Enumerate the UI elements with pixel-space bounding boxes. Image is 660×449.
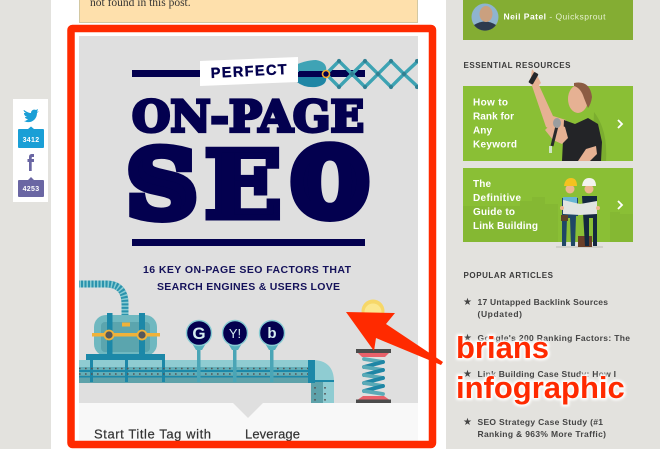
title: seo: O xyxy=(294,131,366,235)
icon: yahoo gauge xyxy=(222,320,248,382)
red frame xyxy=(71,28,432,444)
icon: presenter xyxy=(528,69,606,161)
avatar xyxy=(472,4,498,31)
arrow xyxy=(346,312,443,365)
spring xyxy=(356,349,391,404)
claw xyxy=(298,60,326,72)
list: popular articles: ★ xyxy=(463,297,472,308)
icon: yahoo gauge: Y! xyxy=(229,326,241,341)
panel: infographic xyxy=(76,36,431,442)
lower panel and notch xyxy=(233,403,391,418)
card: link building: Guide to xyxy=(473,207,515,218)
card: how to rank: Any xyxy=(473,126,492,136)
share widget xyxy=(13,99,48,202)
title: seo: S xyxy=(127,130,197,238)
callout: yellow notice box xyxy=(80,0,418,22)
list: popular articles: Google's 200 Ranking Factors: The xyxy=(478,333,630,343)
list: popular articles: (Updated) xyxy=(478,309,522,319)
list: popular articles: ★ xyxy=(463,417,472,428)
title: seo xyxy=(128,141,370,223)
icon: bing gauge xyxy=(260,320,284,382)
title: on-page: ON-PAGE xyxy=(132,92,364,142)
card: how to rank: How to xyxy=(473,98,508,108)
sidebar top card xyxy=(463,0,633,40)
twitter count: 3412 xyxy=(23,137,39,144)
callout: brians infographic xyxy=(456,330,625,405)
perfect banner: PERFECT xyxy=(210,62,287,82)
perfect banner xyxy=(132,57,431,89)
icon: twitter bird xyxy=(24,109,39,122)
list: popular articles: ★ xyxy=(463,333,472,344)
heading: essential resources: ESSENTIAL RESOURCES xyxy=(464,61,571,70)
facebook count: 4253 xyxy=(23,186,39,193)
list: popular articles: 17 Untapped Backlink Sources xyxy=(478,297,608,307)
machine xyxy=(76,284,165,360)
callout: brians infographic: infographic xyxy=(456,370,625,405)
lattice arm xyxy=(328,58,418,90)
list: popular articles: ★ xyxy=(463,369,472,380)
callout: brians infographic: infographic xyxy=(456,370,625,405)
card: link building: Link Building xyxy=(473,221,538,232)
text block: lower panel: Start Title Tag with xyxy=(94,426,211,442)
icon: builders xyxy=(556,178,603,248)
text block: lower panel xyxy=(94,428,300,441)
skyline xyxy=(463,197,633,242)
card: link building: Definitive xyxy=(473,193,521,204)
list: popular articles: Ranking & 963% More Traffic) xyxy=(478,429,606,439)
card: how to rank xyxy=(463,69,633,161)
icon: google gauge xyxy=(186,320,212,382)
subtitle: 16 KEY ON-PAGE SEO FACTORS THAT xyxy=(143,264,352,276)
card: how to rank: Keyword xyxy=(473,140,517,150)
heading: popular articles: POPULAR ARTICLES xyxy=(464,271,554,280)
icon: chevron xyxy=(618,120,622,128)
text block: lower panel: Leverage xyxy=(245,426,300,442)
pipeline xyxy=(79,360,334,403)
card: how to rank: Rank for xyxy=(473,112,514,122)
icon: google gauge: G xyxy=(192,324,206,343)
icon: chevron xyxy=(618,201,622,209)
icon: gold coin xyxy=(362,300,384,313)
card: link building xyxy=(463,168,633,248)
perfect tag xyxy=(200,57,298,86)
title: seo: E xyxy=(204,131,282,240)
icon: bing gauge: b xyxy=(267,325,277,342)
sidebar top card: Neil Patel - Quicksprout xyxy=(504,12,606,22)
list: popular articles: Link Building Case Study: How I xyxy=(478,369,616,379)
callout: brians infographic: brians xyxy=(456,330,549,365)
subtitle xyxy=(144,266,351,290)
callout: brians infographic: brians xyxy=(456,330,549,365)
list: popular articles: SEO Strategy Case Study (#1 xyxy=(478,417,603,427)
card: link building: The xyxy=(473,179,491,190)
subtitle: SEARCH ENGINES & USERS LOVE xyxy=(157,281,340,293)
list: popular articles xyxy=(463,297,630,439)
icon: facebook f xyxy=(28,154,34,171)
